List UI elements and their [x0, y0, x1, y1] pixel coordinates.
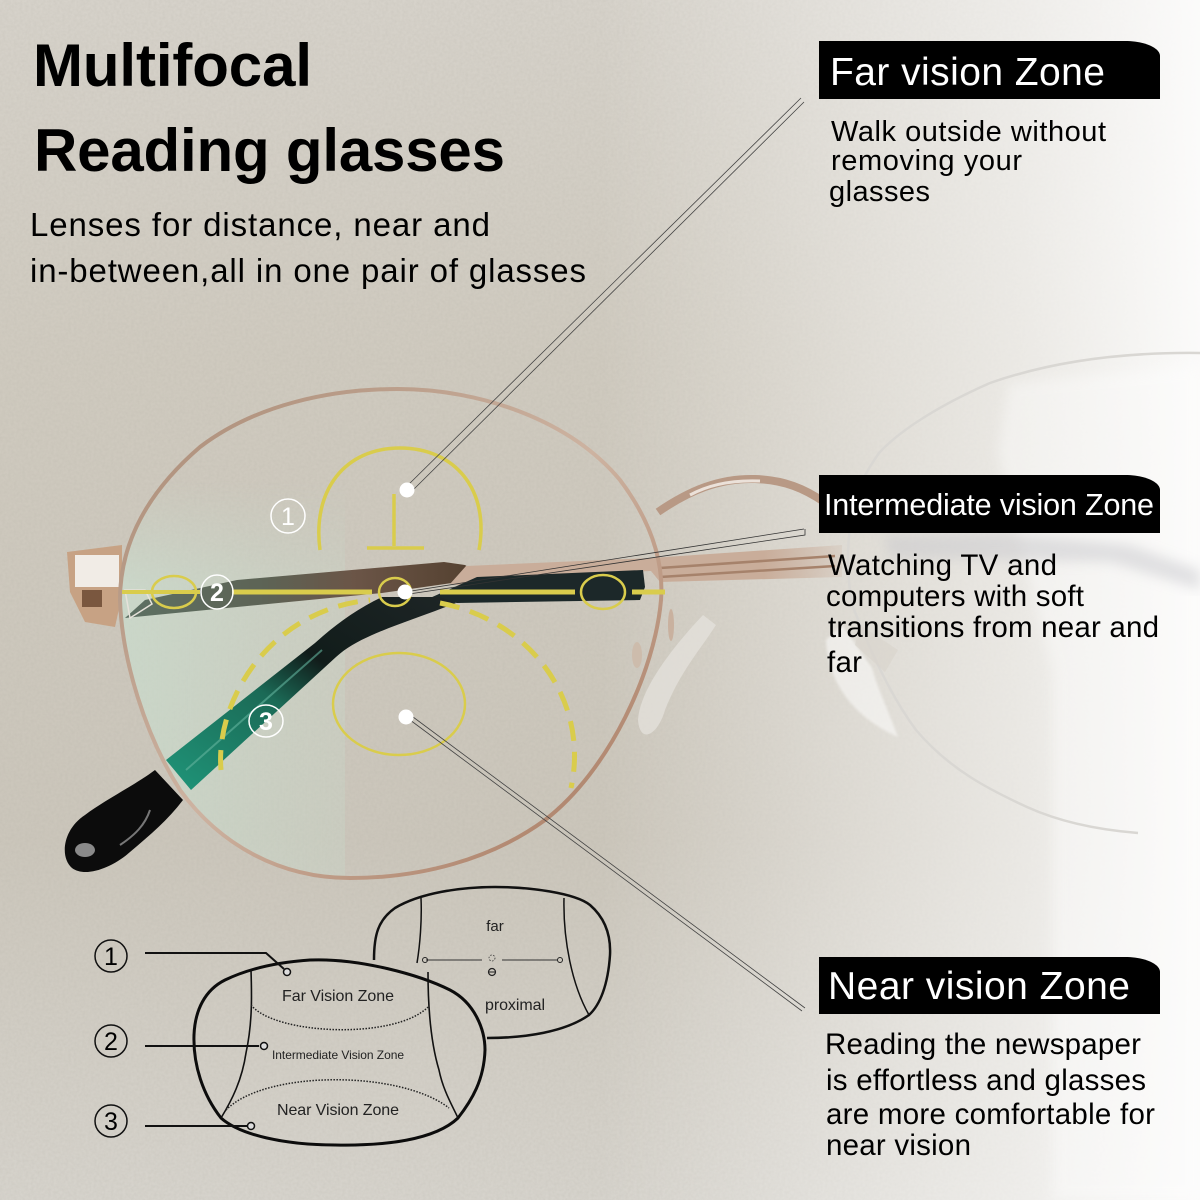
- marker 2: 2: [210, 579, 224, 607]
- diagram: back lens: [374, 887, 610, 1038]
- diagram: numbered callouts: 2: [104, 1028, 118, 1056]
- diagram: far zone arc: [319, 448, 481, 550]
- text: far vision: Walk outside without: [831, 116, 1106, 148]
- photo: second lens, faded: [826, 353, 1200, 1200]
- text: intermediate vision: transitions from near and: [828, 611, 1159, 644]
- text: near vision: are more comfortable for: [826, 1098, 1155, 1131]
- marker 3: [249, 705, 283, 737]
- text: intermediate vision: computers with soft: [826, 580, 1084, 613]
- text: near vision: near vision: [826, 1129, 971, 1162]
- marker 3: 3: [259, 708, 273, 736]
- heading: intermediate vision: [819, 475, 1160, 533]
- diagram: numbered callouts: 3: [104, 1108, 118, 1136]
- title: Reading glasses: [34, 117, 505, 184]
- text: far vision: [829, 116, 1106, 208]
- diagram: back lens: far: [486, 918, 504, 935]
- photo: nose pad: [632, 609, 716, 734]
- diagram: front lens: Intermediate Vision Zone: [272, 1048, 404, 1062]
- subtitle: [30, 206, 586, 289]
- diagram: front lens: Near Vision Zone: [277, 1102, 399, 1119]
- heading: far vision: Far vision Zone: [830, 51, 1105, 94]
- subtitle: in-between,all in one pair of glasses: [30, 252, 586, 289]
- marker 1: [271, 499, 305, 533]
- title: [33, 32, 505, 184]
- title: Multifocal: [33, 32, 312, 99]
- heading: near vision: [819, 957, 1160, 1014]
- text: intermediate vision: [826, 549, 1159, 679]
- photo: temple tip: [65, 770, 183, 872]
- text: near vision: [825, 1028, 1155, 1162]
- text: far vision: glasses: [829, 176, 930, 208]
- subtitle: Lenses for distance, near and: [30, 206, 490, 243]
- text: intermediate vision: Watching TV and: [828, 549, 1057, 582]
- text: intermediate vision: far: [827, 646, 862, 679]
- text: near vision: Reading the newspaper: [825, 1028, 1141, 1061]
- photo: hinge: [67, 545, 122, 627]
- leader line: far zone: [400, 98, 804, 498]
- leader line: near zone: [398, 710, 805, 1011]
- diagram: numbered callouts: [95, 940, 290, 1137]
- marker 2: [201, 575, 233, 609]
- diagram: front lens: [194, 960, 485, 1145]
- text: far vision: removing your: [831, 145, 1022, 177]
- heading: far vision: [819, 41, 1160, 99]
- photo: bridge: [658, 479, 824, 512]
- diagram: back lens: proximal: [485, 997, 545, 1014]
- photo: lens tint: [122, 534, 335, 874]
- marker 1: 1: [281, 503, 295, 531]
- diagram: near zone circle: [333, 653, 465, 755]
- diagram: numbered callouts: 1: [104, 943, 118, 971]
- heading: near vision: Near vision Zone: [828, 965, 1130, 1008]
- diagram: near zone dashed arc: [221, 600, 575, 788]
- text: near vision: is effortless and glasses: [826, 1064, 1146, 1097]
- photo: folded temple arm: [125, 545, 842, 790]
- heading: intermediate vision: Intermediate vision Zone: [824, 488, 1154, 522]
- diagram: front lens: Far Vision Zone: [282, 988, 394, 1005]
- diagram: intermediate line and circles: [122, 575, 665, 609]
- leader line: intermediate zone: [398, 529, 805, 600]
- photo: lens frame: [120, 389, 661, 878]
